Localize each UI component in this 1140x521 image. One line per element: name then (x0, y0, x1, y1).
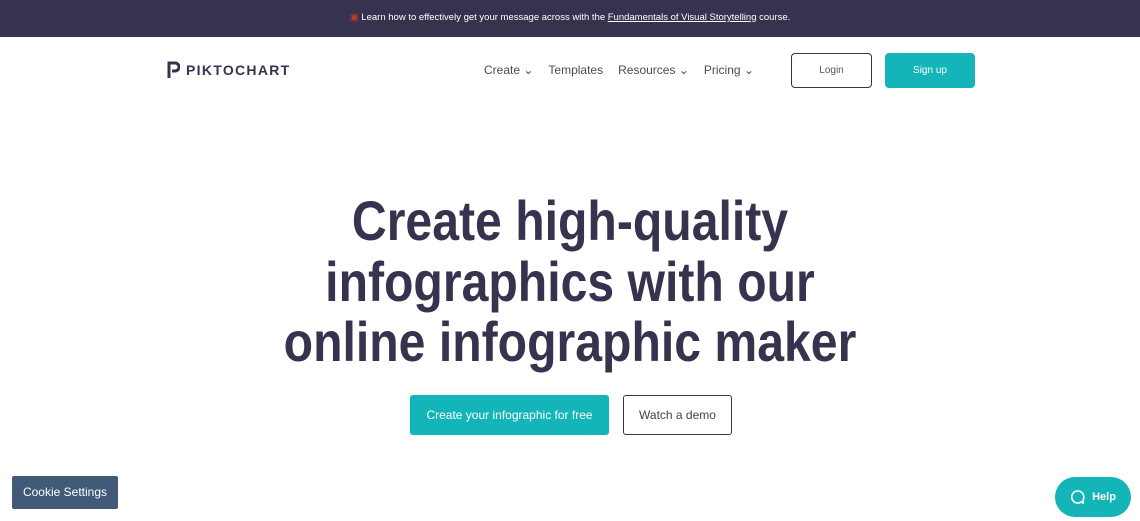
nav menu: Pricing ⌄ (704, 63, 754, 77)
hero heading (284, 189, 856, 373)
nav menu: Templates (548, 63, 603, 77)
CTA button: Create your infographic for free (426, 408, 593, 422)
cookie settings button: Cookie Settings (23, 485, 107, 499)
top banner (0, 0, 1140, 37)
cookie settings button (12, 476, 118, 509)
nav menu: Resources ⌄ (618, 63, 689, 77)
nav menu (484, 63, 754, 77)
hero heading: Create high-quality (352, 189, 788, 252)
CTA button (410, 395, 609, 435)
watch demo button (623, 395, 732, 435)
top banner: ▣ Learn how to effectively get your message across with the Fundamentals of Visual Storytelling course. (350, 12, 790, 23)
watch demo button: Watch a demo (639, 408, 716, 422)
nav menu: Create ⌄ (484, 63, 533, 77)
sign up button (885, 53, 975, 88)
sign up button: Sign up (913, 65, 947, 76)
help button (1055, 477, 1131, 517)
help button: Help (1092, 491, 1116, 503)
login button (791, 53, 872, 88)
hero heading: online infographic maker (284, 310, 856, 373)
hero heading: infographics with our (325, 250, 815, 312)
login button: Login (819, 65, 844, 76)
logo: PIKTOCHART (186, 62, 291, 78)
